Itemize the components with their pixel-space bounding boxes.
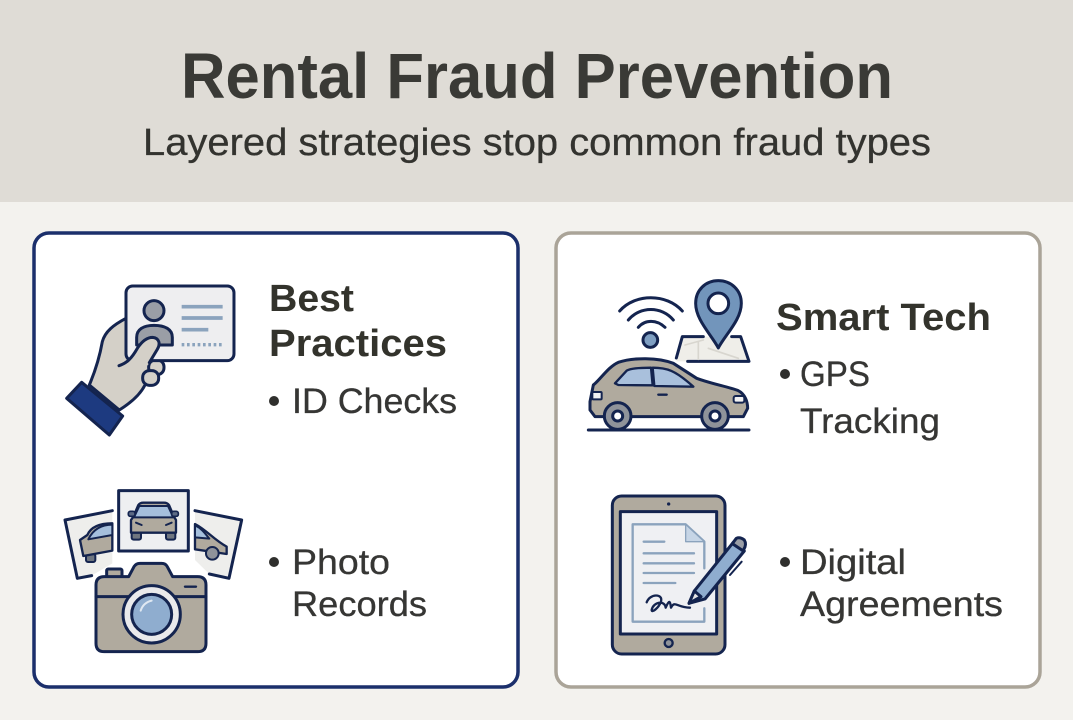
icon: camera with car photos (65, 491, 242, 652)
title: Rental Fraud Prevention (181, 40, 893, 112)
heading: best practices: Practices (269, 323, 447, 365)
bullet: photo records (269, 543, 427, 624)
document (633, 524, 704, 622)
car (588, 359, 749, 430)
icon: hand holding id card (67, 286, 234, 435)
heading: smart tech: Smart Tech (776, 297, 991, 339)
icon: tablet with signed document (612, 496, 746, 654)
bullet: gps tracking: GPS (800, 355, 870, 394)
panel: best practices (34, 233, 518, 687)
center photo (119, 491, 188, 551)
bullet: gps tracking (780, 355, 940, 441)
heading: best practices (269, 278, 447, 365)
header band (0, 0, 1073, 202)
bullet: digital agreements (780, 543, 1003, 624)
bullet: digital agreements: Digital (800, 543, 906, 582)
bullet: photo records: Photo (292, 543, 390, 582)
left photo (65, 511, 112, 578)
pen (689, 538, 746, 603)
map (676, 337, 749, 361)
signature (647, 595, 690, 611)
wifi signal (620, 298, 682, 347)
bullet: gps tracking: Tracking (800, 402, 940, 441)
subtitle: Layered strategies stop common fraud types (143, 122, 931, 164)
panel: smart tech (556, 233, 1040, 687)
bullet: photo records: Records (292, 585, 427, 624)
heading: best practices: Best (269, 278, 354, 320)
camera body (96, 563, 206, 652)
icon: car with gps pin and wifi (588, 281, 749, 430)
right photo (195, 511, 242, 578)
map pin (696, 281, 741, 348)
bullet: id checks: ID Checks (292, 382, 457, 421)
bullet: digital agreements: Agreements (800, 585, 1003, 624)
